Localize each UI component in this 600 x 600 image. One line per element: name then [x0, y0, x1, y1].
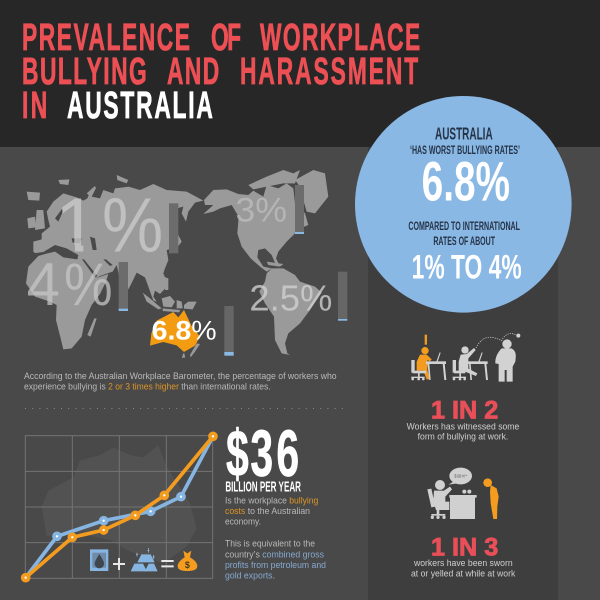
panel: blue circle — [355, 96, 572, 313]
chart: blue line — [26, 436, 213, 578]
circle: Australia: AUSTRALIA — [435, 123, 493, 143]
bar: 4% — [119, 262, 128, 311]
equivalence description — [225, 539, 326, 581]
panel: right column — [368, 147, 558, 600]
text: sworn at — [411, 558, 516, 579]
text: witnessed: Workers has witnessed some — [407, 421, 519, 431]
title: IN — [22, 84, 47, 126]
icon: yelling boss: $@#!* — [454, 474, 467, 479]
chart: orange line — [23, 433, 216, 581]
label: 4% — [27, 251, 113, 318]
circle: compared: COMPARED TO INTERNATIONAL — [408, 219, 520, 233]
icon: yelling boss — [427, 468, 499, 519]
equivalence description: country’s combined gross — [225, 549, 324, 559]
icon: money bag: $ — [185, 560, 190, 570]
label: 6.8%: 6.8% — [152, 315, 217, 345]
cost description: economy. — [225, 517, 261, 527]
label: 2.5%: 2.5% — [249, 279, 332, 319]
map: Australia highlight — [150, 310, 200, 352]
title: BULLYING — [22, 50, 147, 92]
equivalence description: profits from petroleum and — [225, 560, 326, 570]
icon: gold bars — [131, 548, 158, 571]
label: 1%: % — [102, 183, 163, 268]
circle: rates of about: RATES OF ABOUT — [433, 234, 495, 248]
panel: world map — [24, 170, 347, 391]
header band — [0, 0, 600, 147]
stat: 1 in 3: 1 IN 3 — [431, 533, 498, 561]
panel: cost chart — [23, 416, 326, 581]
label: 4%: 4 — [27, 251, 60, 318]
icon: equals — [161, 561, 174, 566]
title: WORKPLACE — [260, 16, 420, 58]
map: seas — [33, 209, 113, 277]
equivalence description: This is equivalent to the — [225, 539, 315, 549]
equivalence description: gold exports. — [225, 571, 275, 581]
icon: plus — [113, 558, 125, 570]
title: AUSTRALIA — [67, 84, 213, 126]
chart: grid — [25, 436, 213, 578]
title: AND — [167, 50, 219, 92]
bar: 2.5% — [338, 272, 347, 321]
map: land masses — [26, 170, 328, 358]
stat: 1 in 2: 1 IN 2 — [431, 396, 498, 424]
stat label: billion per year: BILLION PER YEAR — [225, 479, 301, 495]
title — [22, 16, 420, 126]
text: witnessed: form of bullying at work. — [418, 431, 508, 441]
label: 1%: 1 — [55, 184, 98, 269]
stat: $36: $36 — [226, 416, 299, 490]
map description: According to the Australian Workplace Barometer, the percentage of workers who — [24, 371, 337, 381]
icon: witnessing bullying — [411, 334, 520, 382]
text: witnessed — [407, 421, 519, 441]
circle: 1% to 4%: 1% TO 4% — [412, 248, 522, 286]
bar: 6.8% — [224, 306, 234, 356]
label: 1% — [62, 198, 161, 252]
cost description: Is the workplace bullying — [225, 495, 318, 505]
circle: quote: ‘HAS WORST BULLYING RATES’ — [410, 143, 520, 157]
bar: 1% — [169, 203, 178, 253]
icon: money bag — [178, 551, 197, 571]
title: PREVALENCE — [22, 16, 190, 58]
cost description — [225, 495, 318, 527]
map description: experience bullying is 2 or 3 times higher than international rates. — [24, 381, 271, 391]
title: HARASSMENT — [240, 50, 418, 92]
cost description: costs to the Australian — [225, 506, 310, 516]
circle: 6.8%: 6.8% — [422, 151, 510, 213]
text: sworn at: at or yelled at while at work — [411, 569, 516, 579]
label: 3%: 3% — [235, 192, 287, 230]
chart: Australia silhouette — [42, 445, 197, 563]
label: 4%: % — [64, 251, 113, 318]
icon: oil barrel — [90, 549, 108, 571]
dotted divider — [25, 408, 349, 410]
map description — [24, 371, 337, 391]
panel: bullying statistics — [407, 334, 520, 579]
bar: 3% — [295, 185, 304, 234]
text: sworn at: workers have been sworn — [413, 558, 513, 568]
title: OF — [211, 16, 241, 58]
